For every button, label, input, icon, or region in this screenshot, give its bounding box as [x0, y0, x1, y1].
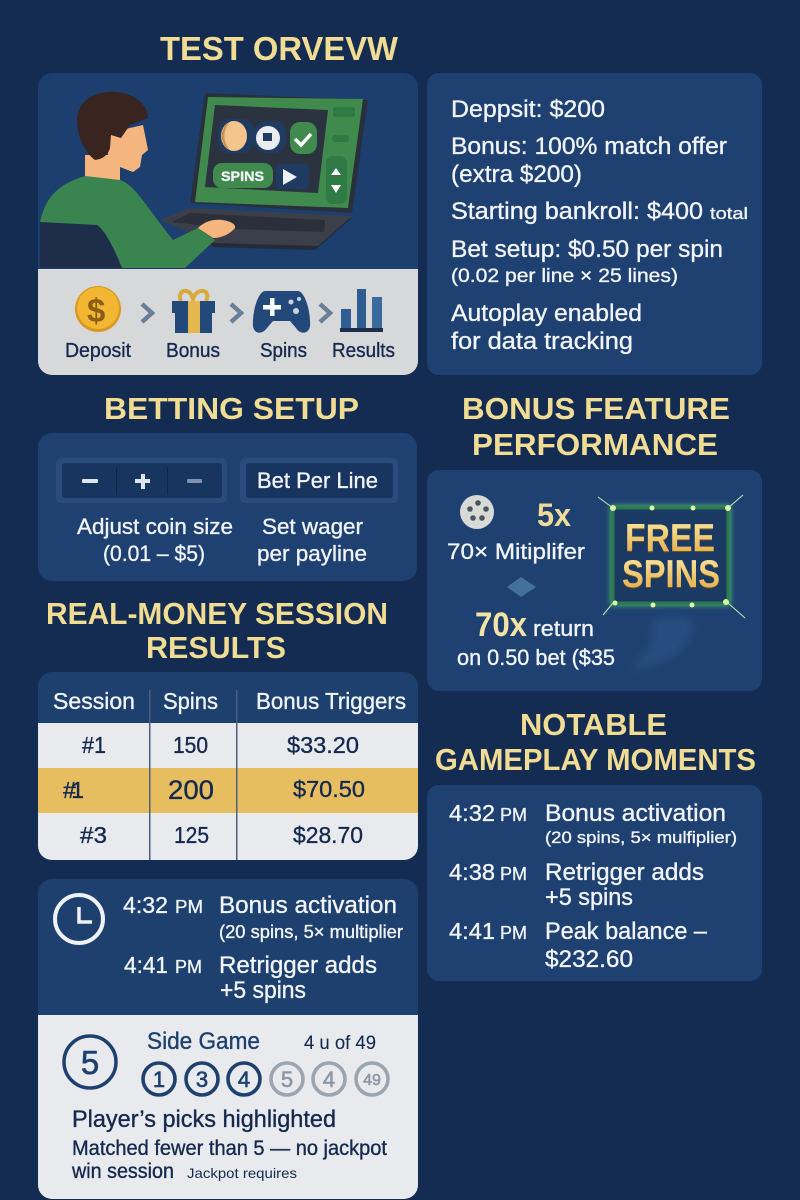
timeline entries: (20 spins, 5× multiplier	[219, 922, 403, 942]
panel: betting setup: Set wager	[262, 514, 363, 539]
panel: timeline and side game: Player’s picks highlighted	[72, 1106, 336, 1133]
number balls	[143, 1063, 388, 1095]
row 1: 150	[173, 732, 208, 758]
number balls: 4	[323, 1067, 335, 1092]
icon: number five badge: 5	[81, 1044, 99, 1081]
table header: Session	[53, 688, 135, 714]
icon: number five badge	[64, 1036, 116, 1088]
row 2 highlighted: 200	[168, 775, 214, 805]
flow labels: Spins	[260, 340, 307, 362]
heading: bonus feature performance: PERFORMANCE	[472, 427, 718, 462]
heading: notable gameplay moments: GAMEPLAY MOMENTS	[435, 742, 756, 777]
timeline entries: 4:41	[124, 952, 168, 978]
table header: Bonus Triggers	[256, 688, 406, 714]
icon: bonus gift	[172, 291, 215, 333]
icon: clock	[55, 895, 103, 943]
panel: timeline and side game: 4 u of 49	[304, 1033, 376, 1054]
row 2 highlighted: #1	[63, 777, 84, 803]
heading: bonus feature performance	[462, 391, 730, 462]
panel: test illustration and flow	[38, 73, 418, 375]
panel: notable moments: PM	[500, 864, 527, 884]
panel: test details: Starting bankroll: $400	[451, 198, 703, 225]
bet per line control: Bet Per Line	[257, 468, 378, 493]
row 3: #3	[80, 822, 107, 848]
table header	[54, 692, 406, 714]
panel: notable moments: Peak balance –	[545, 918, 708, 945]
panel: notable moments: 4:32	[449, 800, 495, 826]
icon: deposit coin: $	[87, 292, 105, 329]
panel: bonus feature: on 0.50 bet ($35	[457, 645, 615, 670]
illustration: player at laptop: SPINS	[221, 168, 264, 184]
number balls: 5	[281, 1067, 293, 1092]
table header: Spins	[163, 688, 218, 714]
timeline entries: Retrigger adds	[219, 952, 377, 979]
number balls: 4	[238, 1067, 250, 1092]
heading: bonus feature performance: BONUS FEATURE	[462, 391, 730, 426]
panel: bonus feature: return	[533, 616, 594, 641]
panel: timeline and side game: win session	[71, 1160, 174, 1183]
panel: notable moments: $232.60	[545, 946, 633, 973]
heading: betting setup: BETTING SETUP	[104, 391, 359, 426]
panel: bonus feature: 5x	[537, 497, 571, 533]
panel: test details: total	[710, 204, 748, 223]
panel: notable moments	[427, 785, 762, 981]
icon: diamond	[507, 577, 536, 597]
number balls: 1	[153, 1067, 165, 1092]
number balls: 3	[196, 1067, 208, 1092]
heading: real-money session results: RESULTS	[146, 630, 286, 665]
panel: bonus feature: 70× Mitiplifer	[447, 539, 585, 564]
bet per line control	[240, 458, 398, 503]
row 3: 125	[174, 822, 209, 848]
heading: notable gameplay moments	[435, 707, 756, 777]
coin size control	[56, 458, 227, 503]
panel: notable moments: Bonus activation	[545, 800, 726, 827]
panel: test details: for data tracking	[451, 328, 633, 355]
title: TEST ORVEVW	[160, 30, 399, 67]
free spins badge	[598, 495, 745, 618]
panel: test details: Deppsit: $200	[451, 96, 605, 123]
row 1: #1	[82, 732, 106, 758]
row 3	[80, 826, 362, 845]
panel: bonus feature: 70x	[475, 606, 527, 644]
flow labels: Results	[332, 340, 395, 362]
row 2 highlighted	[62, 780, 364, 800]
flow labels: Deposit	[65, 340, 131, 362]
panel: test details: Bonus: 100% match offer	[451, 133, 727, 160]
panel: test details: (0.02 per line × 25 lines)	[451, 266, 678, 287]
row 1: $33.20	[287, 732, 359, 758]
icon: deposit coin	[75, 286, 121, 332]
panel: notable moments: 4:41	[449, 918, 495, 944]
panel: betting setup: (0.01 – $5)	[103, 541, 205, 566]
icon: flow arrow 3	[320, 304, 330, 322]
panel: notable moments: 4:38	[449, 859, 495, 885]
decorative smudge	[632, 617, 693, 670]
panel: bonus feature	[427, 470, 762, 691]
panel: timeline and side game: Matched fewer than 5 — no jackpot	[72, 1137, 387, 1160]
flow labels	[65, 340, 395, 362]
panel: betting setup: per payline	[257, 541, 367, 566]
free spins badge: SPINS	[622, 553, 720, 596]
panel: timeline and side game: Jackpot requires	[187, 1165, 297, 1181]
timeline entries: +5 spins	[220, 977, 306, 1004]
flow labels: Bonus	[166, 340, 220, 362]
panel: notable moments: PM	[500, 923, 527, 943]
heading: real-money session results: REAL-MONEY SESSION	[46, 596, 388, 631]
panel: test details: (extra $200)	[451, 161, 582, 188]
timeline entries: PM	[175, 897, 203, 917]
panel: test details	[427, 73, 762, 375]
row 3: $28.70	[293, 822, 363, 848]
illustration: player at laptop	[40, 92, 368, 268]
panel: notable moments: +5 spins	[545, 884, 633, 911]
row 2 highlighted: $70.50	[293, 776, 365, 802]
timeline entries	[123, 892, 403, 1004]
icon: spins game controller	[253, 291, 310, 333]
icon: reel disc	[460, 495, 494, 529]
number balls: 49	[363, 1072, 381, 1089]
panel: timeline and side game	[38, 879, 418, 1199]
panel: test details: Autoplay enabled	[451, 300, 642, 327]
icon: flow arrow 1	[142, 304, 152, 322]
panel: betting setup: Adjust coin size	[77, 514, 233, 539]
panel: betting setup	[38, 433, 417, 581]
heading: real-money session results	[46, 596, 388, 665]
panel: notable moments: (20 spins, 5× mulfiplier)	[545, 828, 737, 847]
panel: timeline and side game: Side Game	[147, 1028, 260, 1055]
timeline entries: 4:32	[123, 892, 168, 918]
icon: flow arrow 2	[231, 304, 241, 322]
table: session results	[38, 672, 418, 860]
timeline entries: Bonus activation	[219, 892, 397, 919]
panel: notable moments: Retrigger adds	[545, 859, 704, 886]
free spins badge: FREE	[625, 517, 715, 560]
timeline entries: PM	[175, 957, 202, 977]
panel: notable moments: PM	[500, 805, 527, 825]
heading: notable gameplay moments: NOTABLE	[520, 707, 667, 742]
icon: results bars	[340, 289, 383, 332]
row 1	[82, 736, 358, 755]
panel: test details: Bet setup: $0.50 per spin	[451, 236, 723, 263]
